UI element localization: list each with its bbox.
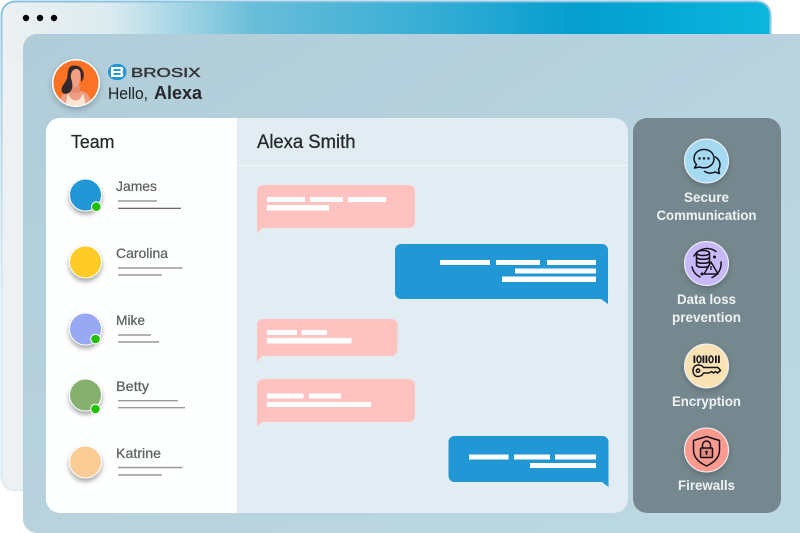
contact: Mike: Mike [116,312,145,328]
label: firewalls: Firewalls [678,478,735,493]
label: prevention: prevention [672,310,741,325]
message bubble: outgoing 1 [395,244,608,304]
contact: James: James [116,178,157,194]
label: communication: Communication [656,208,756,223]
message bubble: incoming 3 [257,379,415,427]
message bubble: incoming 1 [257,185,415,233]
logo: Brosix [108,64,201,80]
icon: data loss prevention [684,242,728,286]
icon: encryption key [684,344,728,388]
contact: Betty: Betty [116,378,149,394]
avatar: Alexa [52,59,100,110]
team heading: Team [71,132,114,152]
contact: James [70,178,181,212]
contact: Mike [70,312,159,345]
message bubble: incoming 2 [257,319,398,362]
features panel [633,118,781,513]
contact: Carolina [70,245,182,278]
message bubble: outgoing 2 [448,436,608,487]
label: secure communication: Secure [684,190,729,205]
greeting: Hello, [108,85,148,103]
label: encryption: Encryption [672,394,741,409]
conversation heading: Alexa Smith [257,132,356,153]
window control dots [23,15,57,21]
contact: Carolina: Carolina [116,245,168,261]
label: data loss: Data loss [677,292,736,307]
contact: Katrine [70,445,182,478]
contact: Katrine: Katrine [116,445,161,461]
contact: Betty [70,378,185,414]
icon: firewall shield [684,428,728,472]
chat window panel [46,118,628,513]
greeting name: Alexa [154,83,203,103]
icon: secure communication [684,139,728,183]
logo: Brosix: BROSIX [131,66,201,80]
